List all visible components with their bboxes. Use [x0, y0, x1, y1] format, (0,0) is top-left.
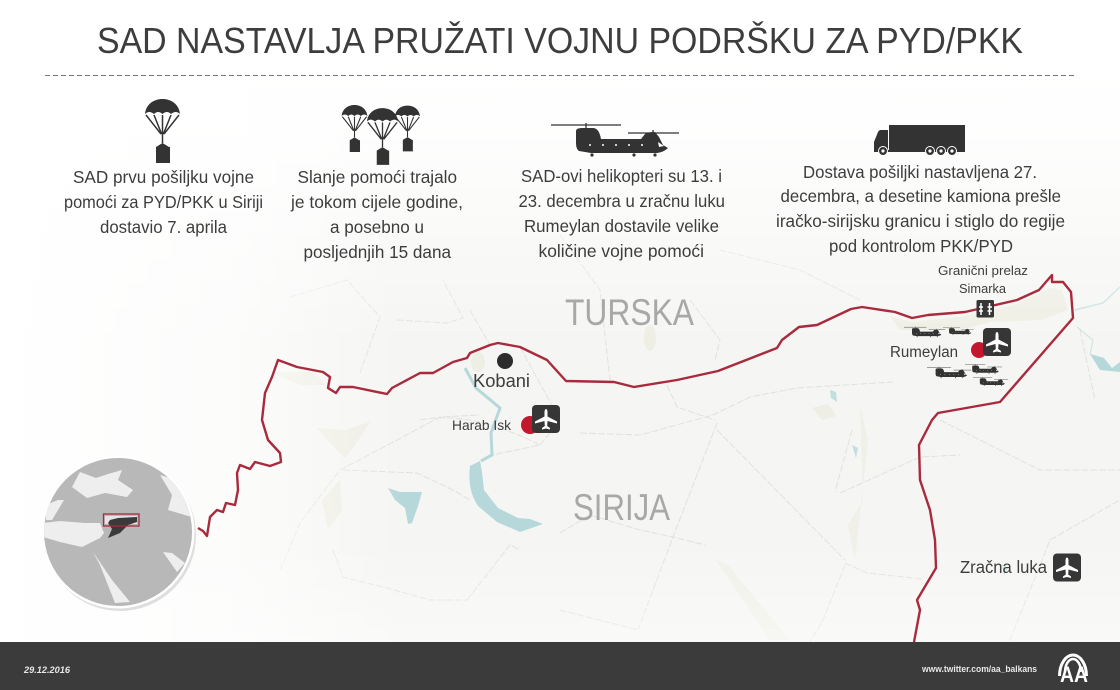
fade overlays [0, 0, 1120, 345]
icon: helicopter [551, 123, 679, 157]
text: truck deliveries: decembra, a desetine kamiona prešle [780, 186, 1061, 206]
text: helicopter deliveries: 23. decembra u zračnu luku [518, 191, 725, 211]
text: truck deliveries [776, 162, 1065, 256]
marker: Harab Isk airfield [452, 405, 560, 434]
logo: Anadolu Agency [1060, 655, 1088, 687]
text: truck deliveries: pod kontrolom PKK/PYD [829, 236, 1013, 256]
marker: Kobani: Kobani [473, 371, 530, 391]
icon: parachute with crate [145, 99, 180, 163]
marker: Rumeylan airfield [890, 328, 1011, 361]
water bodies [388, 354, 1120, 576]
title: SAD NASTAVLJA PRUŽATI VOJNU PODRŠKU ZA PYD/PKK [97, 20, 1023, 61]
faint roads and borders [280, 235, 1120, 642]
text: helicopter deliveries: SAD-ovi helikopteri su 13. i [521, 166, 722, 186]
marker: airport legend: Zračna luka [960, 557, 1047, 577]
marker: Simarka border crossing: Simarka [959, 281, 1007, 296]
text: helicopter deliveries: Rumeylan dostavile velike [524, 216, 719, 236]
country label: Sirija: SIRIJA [573, 487, 670, 528]
text: year-long shipments: Slanje pomoći trajalo [298, 167, 457, 187]
icons: helicopters at Rumeylan [904, 327, 1008, 386]
text: first shipment: pomoći za PYD/PKK u Siriji [64, 192, 263, 212]
text: year-long shipments: a posebno u [330, 217, 424, 237]
text: first shipment [64, 167, 263, 237]
text: year-long shipments [290, 167, 463, 262]
text: first shipment: SAD prvu pošiljku vojne [73, 167, 254, 187]
dashed title rule [45, 74, 1075, 76]
urban and green tinted areas [270, 288, 1068, 640]
logo: Anadolu Agency: AA [1060, 662, 1088, 687]
marker: Simarka border crossing: Granični prelaz [938, 263, 1028, 278]
footer date: 29.12.2016 [23, 665, 71, 675]
panel: first shipment [64, 99, 263, 237]
panel: year-long shipments [290, 105, 463, 262]
icon: three parachutes [342, 105, 420, 165]
border line: Syria north and east [198, 275, 1073, 642]
marker: airport legend [960, 554, 1081, 582]
locator globe [42, 456, 196, 611]
rivers [465, 287, 1120, 461]
text: year-long shipments: je tokom cijele godine, [290, 192, 463, 212]
marker: Harab Isk airfield: Harab Isk [452, 417, 512, 433]
footer bar [0, 642, 1120, 690]
text: helicopter deliveries: količine vojne pomoći [538, 241, 704, 261]
marker: Rumeylan airfield: Rumeylan [890, 344, 958, 361]
icon: truck [874, 125, 965, 156]
marker: Kobani [473, 353, 530, 391]
text: helicopter deliveries [518, 166, 725, 261]
text: first shipment: dostavio 7. aprila [100, 217, 227, 237]
marker: Simarka border crossing [938, 263, 1028, 318]
text: truck deliveries: Dostava pošiljki nastavljena 27. [803, 162, 1037, 182]
text: truck deliveries: iračko-sirijsku granicu i stiglo do regije [776, 211, 1065, 231]
footer twitter link: www.twitter.com/aa_balkans [921, 664, 1037, 675]
text: year-long shipments: posljednjih 15 dana [304, 242, 451, 262]
country label: Turska: TURSKA [565, 292, 694, 333]
panel: truck deliveries [776, 125, 1065, 256]
panel: helicopter deliveries [518, 123, 725, 261]
